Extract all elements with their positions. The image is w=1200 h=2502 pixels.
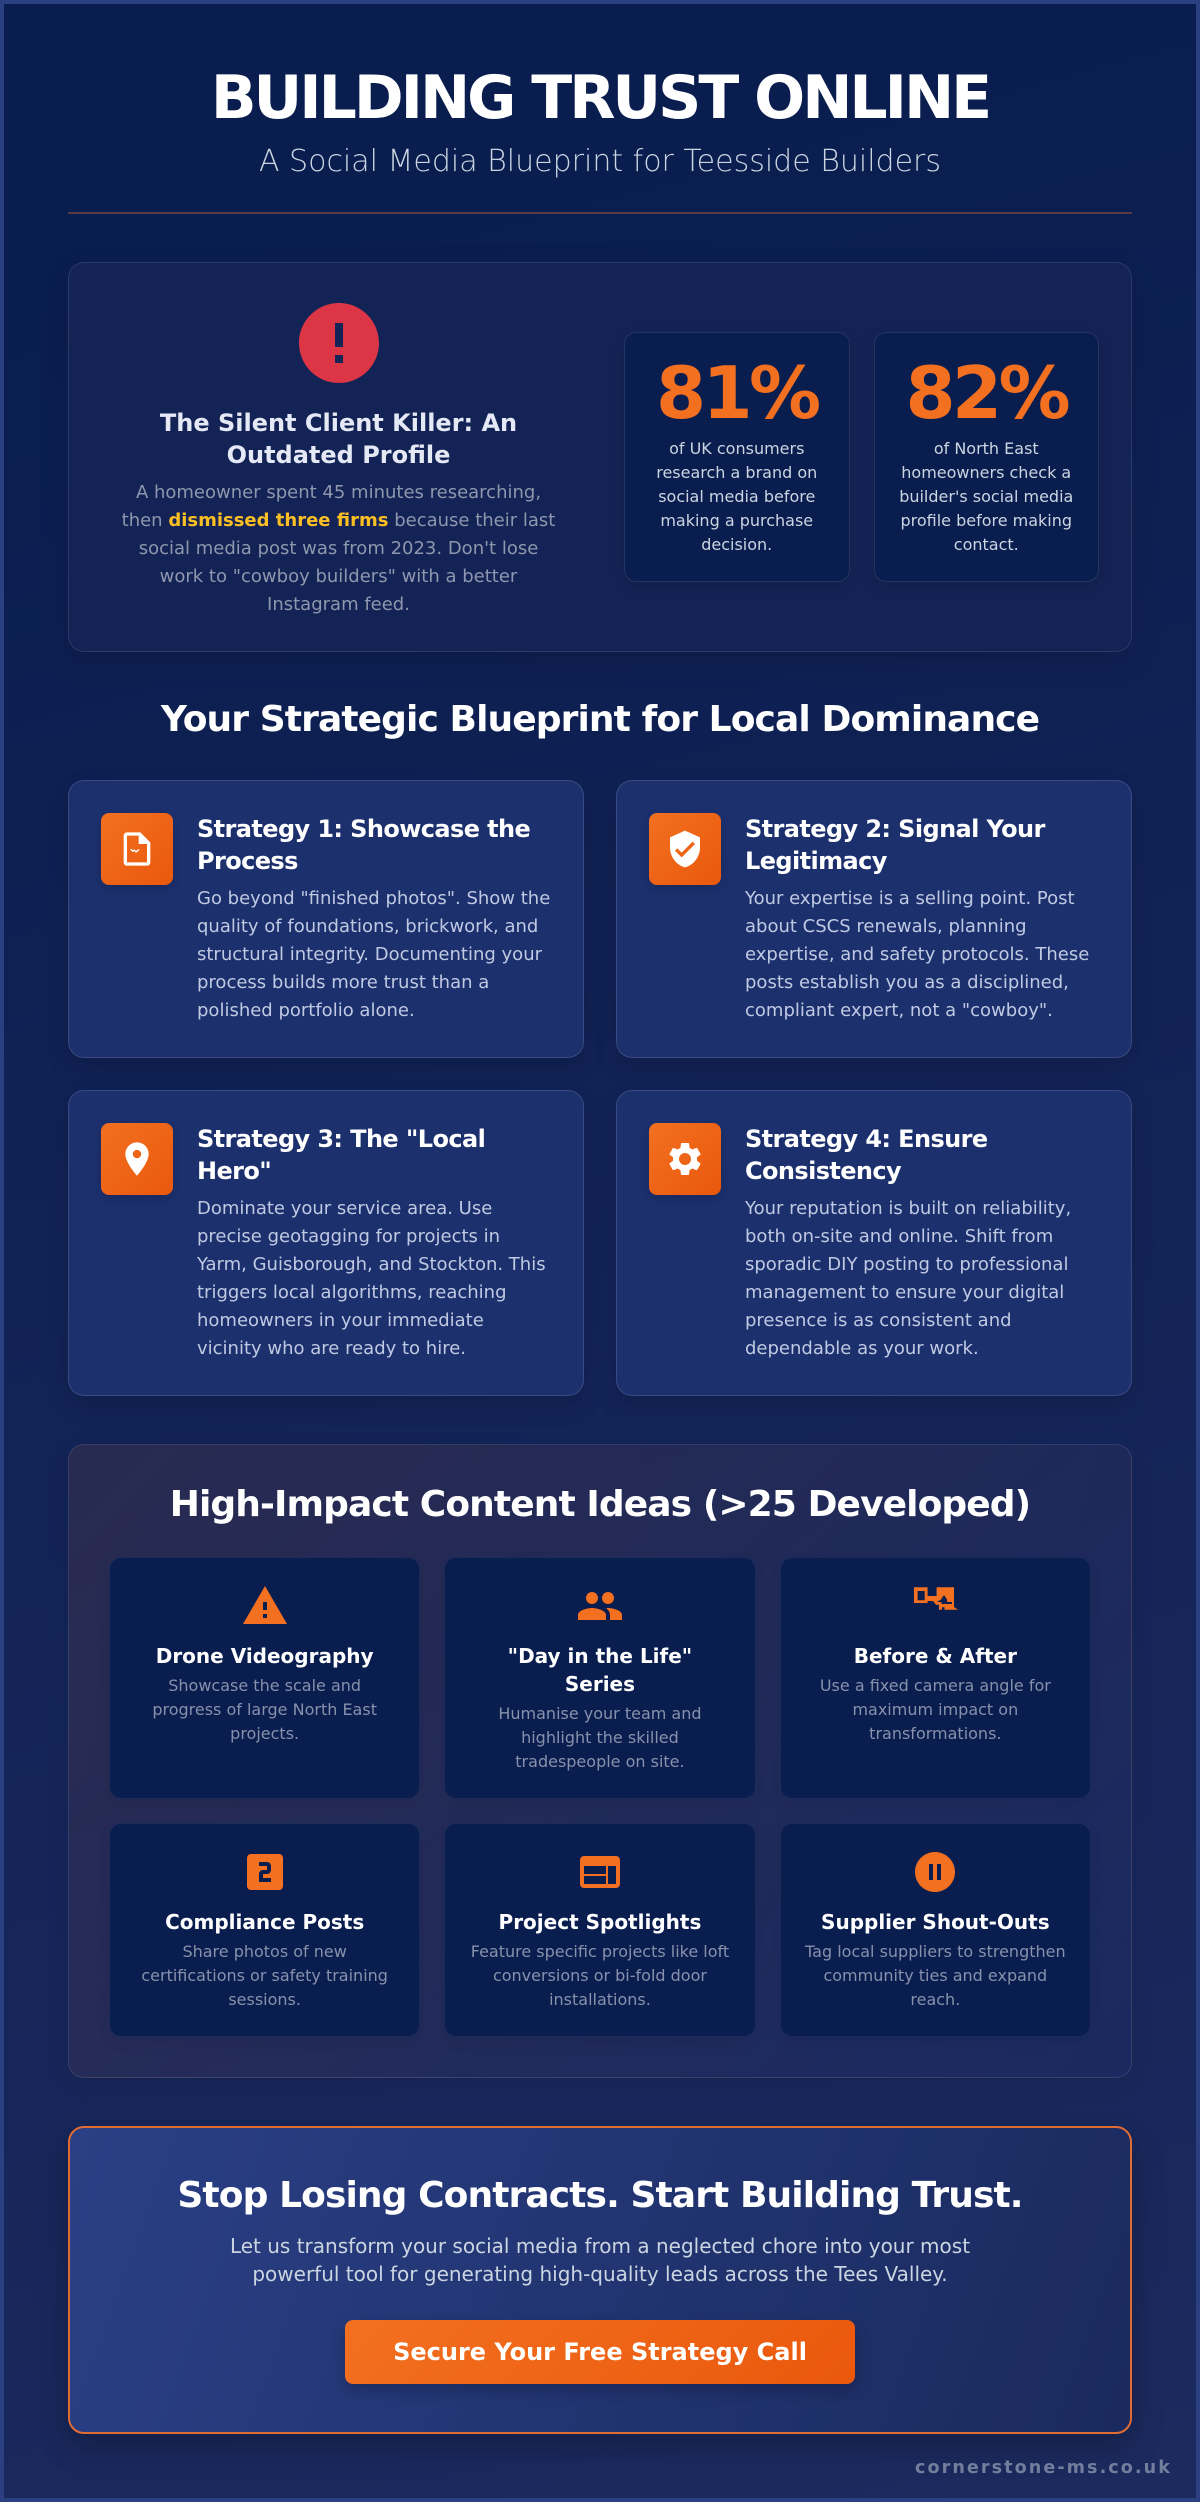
- idea: drone videography: Showcase the scale and progress of large North East projects.: [152, 1676, 377, 1743]
- call to action panel: [68, 2126, 1132, 2434]
- strategy card 1: Go beyond "finished photos". Show the quality of foundations, brickwork, and structural integrity. Documenting your process builds more trust than a polished portfolio alone.: [197, 888, 550, 1021]
- icon: document: [101, 813, 173, 885]
- idea: before and after: Use a fixed camera angle for maximum impact on transformations.: [820, 1676, 1051, 1743]
- idea: day in the life: [444, 1557, 756, 1799]
- problem text: A homeowner spent 45 minutes researching, then dismissed three firms because their last social media post was from 2023. Don't lose work to "cowboy builders" with a better Instagram feed.: [122, 482, 555, 615]
- strategy card 3: Dominate your service area. Use precise geotagging for projects in Yarm, Guisborough, and Stockton. This triggers local algorithms, reaching homeowners in your immediate vicinity who are ready to hire.: [197, 1198, 546, 1359]
- strategy card 2: [616, 780, 1132, 1058]
- icon: gear: [649, 1123, 721, 1195]
- icon: people: [578, 1592, 622, 1620]
- content ideas heading: High-Impact Content Ideas (>25 Developed): [170, 1484, 1030, 1525]
- icon: number badge: [247, 1854, 283, 1890]
- strategy card 3: [68, 1090, 584, 1396]
- icon: before after: [914, 1587, 958, 1610]
- stat: 81%: 81%: [656, 351, 818, 435]
- idea: compliance posts: [109, 1823, 420, 2037]
- idea: compliance posts: Share photos of new certifications or safety training sessions.: [141, 1942, 388, 2009]
- cta heading: Stop Losing Contracts. Start Building Trust.: [177, 2175, 1023, 2216]
- idea: day in the life: Humanise your team and highlight the skilled tradespeople on site.: [498, 1704, 702, 1771]
- idea: supplier shout-outs: Tag local suppliers to strengthen community ties and expand reach.: [805, 1942, 1066, 2009]
- stat: 81%: [624, 332, 850, 582]
- idea: compliance posts: Compliance Posts: [165, 1910, 364, 1934]
- icon: alert: [298, 303, 379, 383]
- icon: warning triangle: [243, 1586, 287, 1624]
- cta button: [345, 2320, 855, 2384]
- idea: before and after: Before & After: [854, 1644, 1017, 1668]
- idea: supplier shout-outs: Supplier Shout-Outs: [821, 1910, 1050, 1934]
- problem heading: The Silent Client Killer: An Outdated Profile: [160, 409, 517, 469]
- strategy section heading: Your Strategic Blueprint for Local Dominance: [161, 699, 1039, 740]
- panel: silent client killer: [68, 262, 1132, 652]
- idea: project spotlights: [444, 1823, 756, 2037]
- cta text: Let us transform your social media from a neglected chore into your most powerful tool for generating high-quality leads across the Tees Valley.: [230, 2234, 970, 2286]
- problem statement: [122, 303, 555, 615]
- idea: project spotlights: Project Spotlights: [499, 1910, 701, 1934]
- strategy card 3: Strategy 3: The "Local Hero": [197, 1125, 485, 1185]
- icon: web layout: [580, 1856, 620, 1888]
- title: BUILDING TRUST ONLINE: [211, 63, 989, 133]
- panel: content ideas: [68, 1444, 1132, 2078]
- strategy card 4: Your reputation is built on reliability, both on-site and online. Shift from sporadic DIY posting to professional management to ensure your digital presence is as consistent and dependable as your work.: [745, 1198, 1071, 1359]
- stat: 82%: of North East homeowners check a builder's social media profile before making contact.: [899, 439, 1073, 554]
- strategy card 1: [68, 780, 584, 1058]
- strategy card 2: Strategy 2: Signal Your Legitimacy: [745, 815, 1045, 875]
- strategy card 4: Strategy 4: Ensure Consistency: [745, 1125, 988, 1185]
- idea: day in the life: "Day in the Life" Series: [508, 1644, 692, 1696]
- idea: supplier shout-outs: [780, 1823, 1091, 2037]
- stat: 81%: of UK consumers research a brand on social media before making a purchase decision.: [656, 439, 817, 554]
- icon: shield check: [649, 813, 721, 885]
- footer url: cornerstone-ms.co.uk: [915, 2458, 1172, 2478]
- header: [68, 4, 1132, 214]
- idea: drone videography: Drone Videography: [156, 1644, 374, 1668]
- stat: 82%: [874, 332, 1099, 582]
- strategy card 4: [616, 1090, 1132, 1396]
- strategy card 2: Your expertise is a selling point. Post about CSCS renewals, planning expertise, and safety protocols. These posts establish you as a disciplined, compliant expert, not a "cowboy".: [745, 888, 1089, 1021]
- idea: drone videography: [109, 1557, 420, 1799]
- strategy card 1: Strategy 1: Showcase the Process: [197, 815, 530, 875]
- icon: location pin: [101, 1123, 173, 1195]
- icon: pause circle: [915, 1852, 955, 1892]
- stat: 82%: 82%: [905, 351, 1067, 435]
- idea: project spotlights: Feature specific projects like loft conversions or bi-fold door installations.: [471, 1942, 729, 2009]
- cta button: Secure Your Free Strategy Call: [393, 2338, 807, 2366]
- subtitle: A Social Media Blueprint for Teesside Builders: [259, 144, 941, 179]
- idea: before and after: [780, 1557, 1091, 1799]
